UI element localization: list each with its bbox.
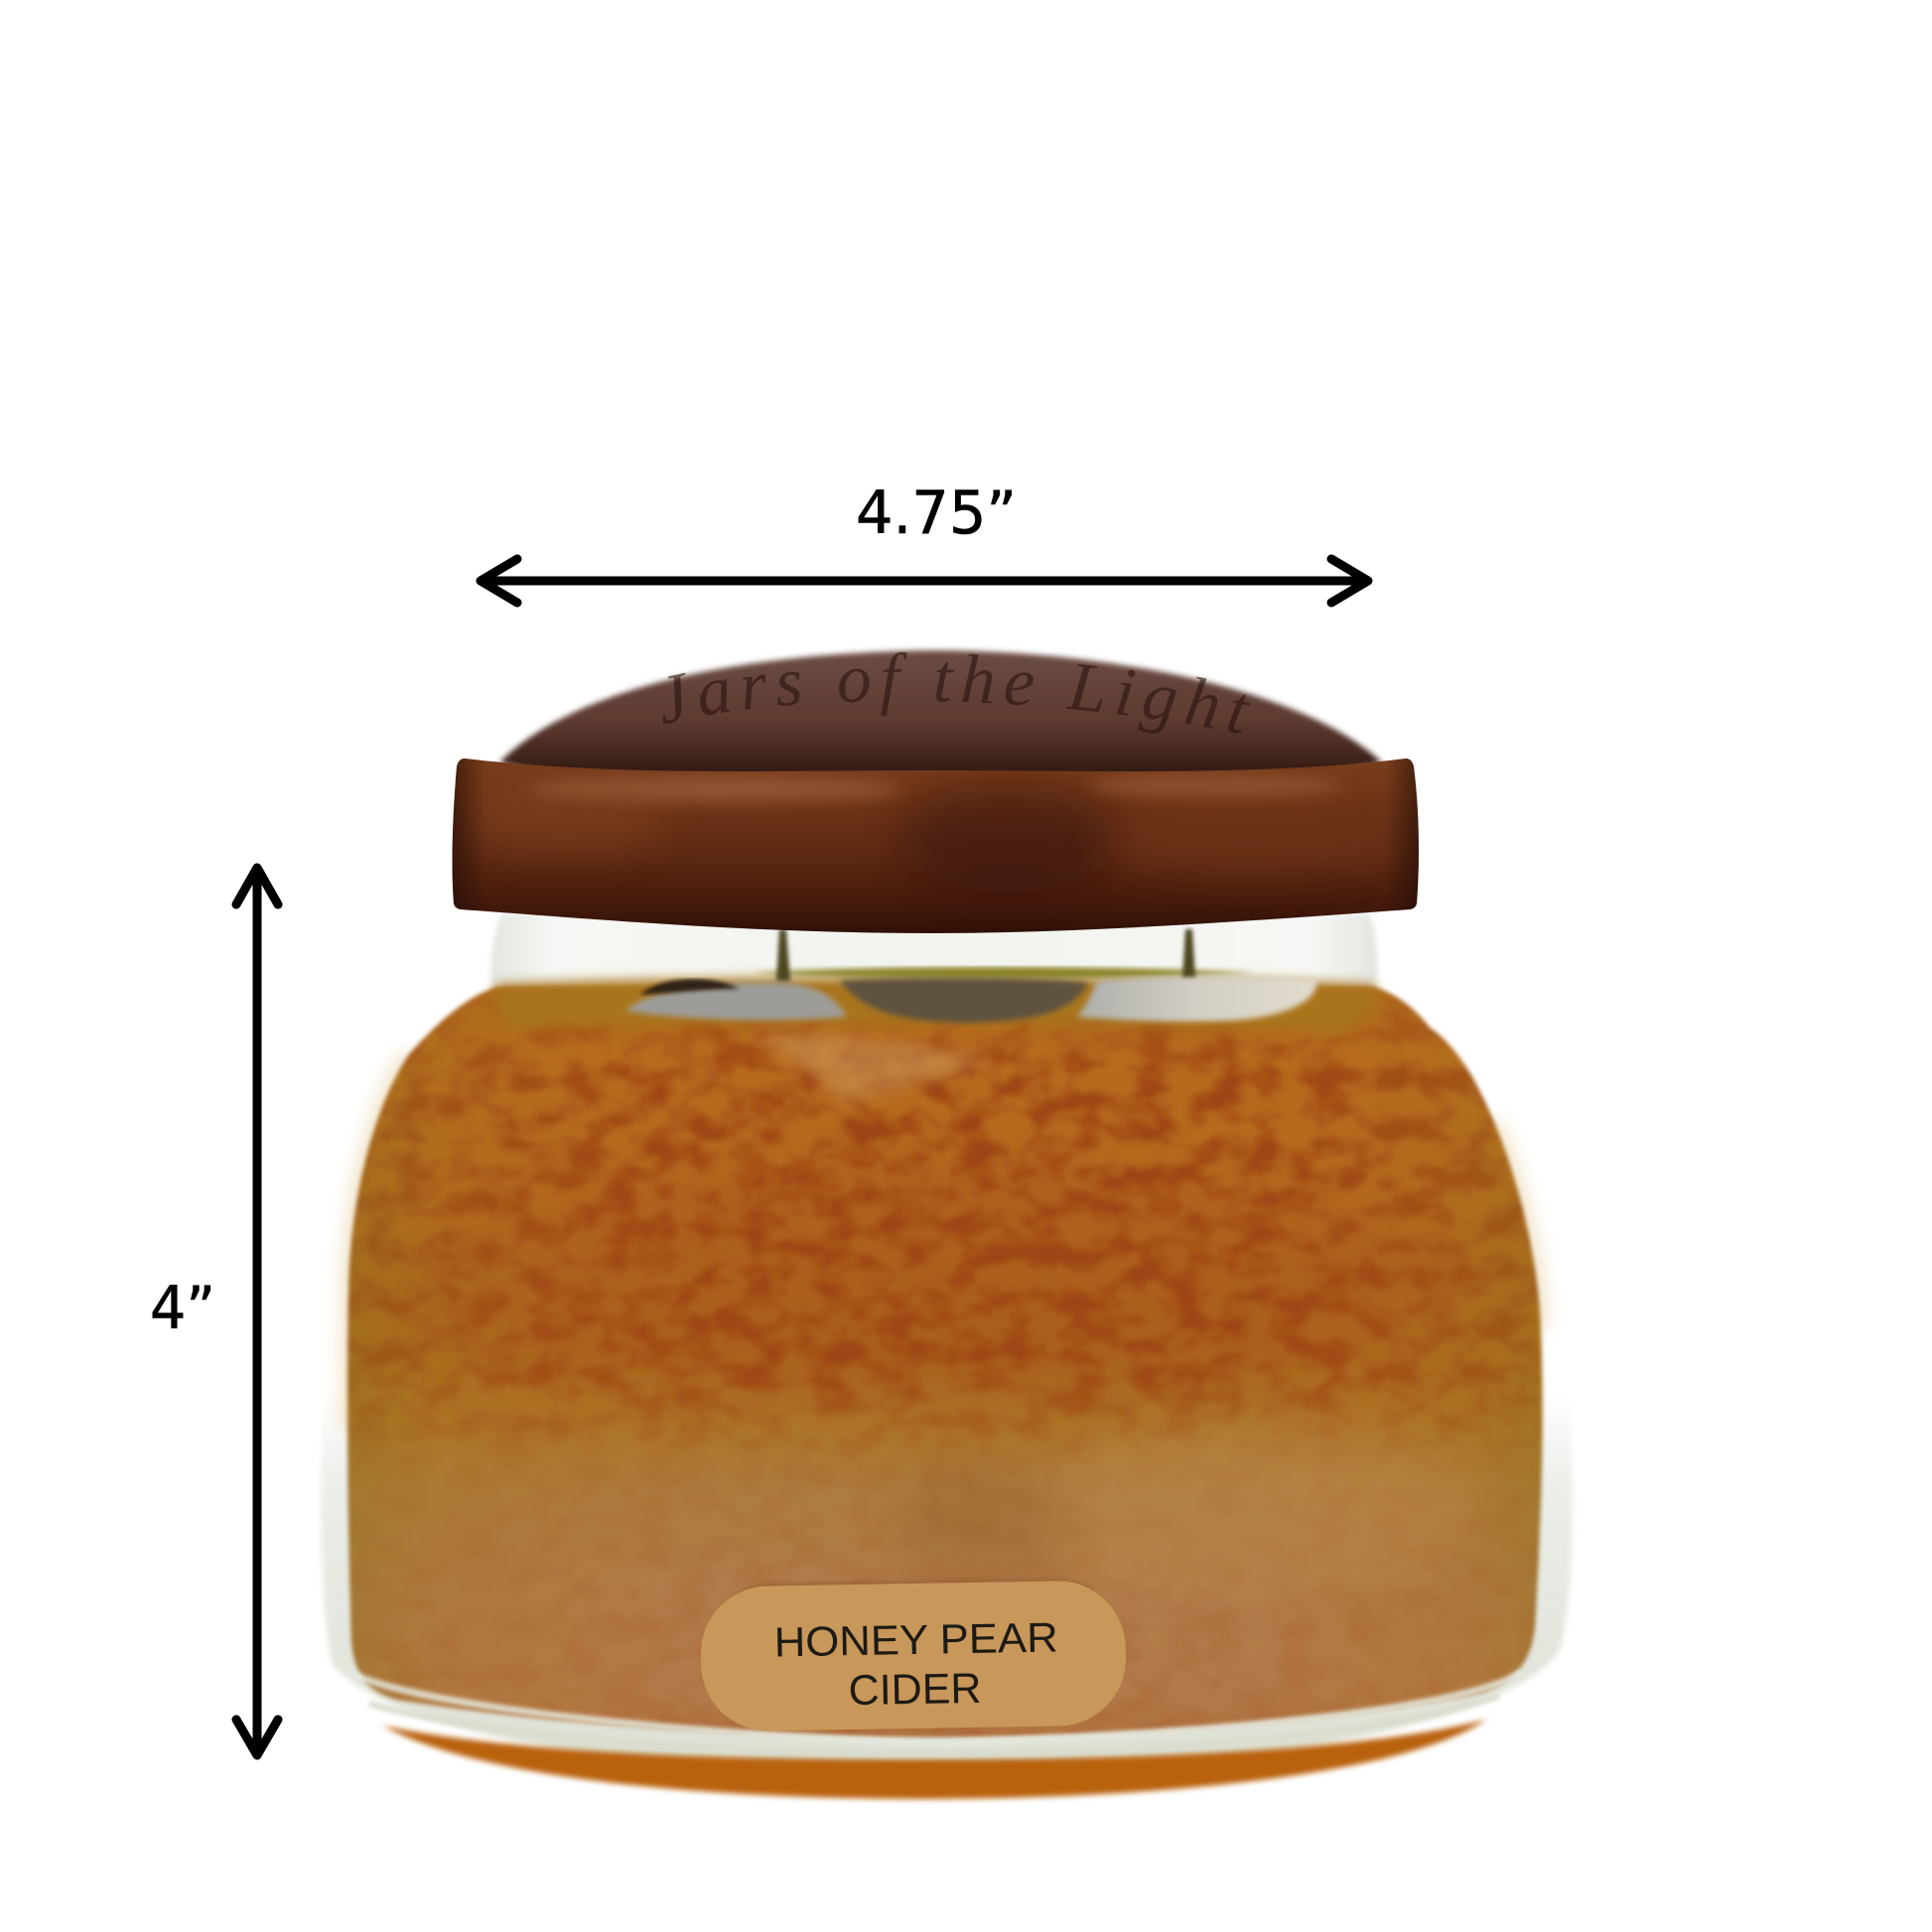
candle pool right xyxy=(1077,976,1316,1022)
glass base halo xyxy=(322,1390,1573,1777)
pale lower wax patch xyxy=(1078,1412,1450,1579)
centre wick pool xyxy=(840,978,1088,1023)
band dark patch xyxy=(898,784,1117,894)
lid embossed text: Jars of the Light xyxy=(663,651,1251,734)
candle pool left xyxy=(625,983,847,1020)
dark hollow xyxy=(640,979,740,995)
width label: 4.75” xyxy=(856,479,1017,548)
lid dome xyxy=(499,650,1382,794)
olive melt line xyxy=(753,967,1256,979)
glass base rim xyxy=(334,1660,1522,1743)
wax top surface xyxy=(495,967,1376,1102)
label shadow xyxy=(706,1577,1121,1729)
label text: HONEY PEAR xyxy=(773,1613,1058,1665)
reddish wax band xyxy=(677,1196,1301,1382)
product label xyxy=(700,1577,1127,1732)
wax mottling xyxy=(338,993,1559,1767)
product label: CIDER xyxy=(848,1665,982,1715)
glass neck xyxy=(490,913,1377,993)
width arrow xyxy=(481,559,1368,603)
lid band xyxy=(447,755,1425,938)
wax body xyxy=(338,978,1559,1772)
height arrow xyxy=(236,868,278,1755)
wax halo xyxy=(347,1054,1541,1430)
dark lower wax patch xyxy=(923,1483,1051,1561)
band highlights xyxy=(526,776,903,802)
orange base shadow xyxy=(382,1720,1486,1799)
pale wax highlight xyxy=(755,1033,993,1102)
upper wax rim xyxy=(495,977,1376,1033)
wicks xyxy=(776,929,1195,981)
jar xyxy=(320,600,1574,1804)
infographic: jar with dimensions xyxy=(153,489,1574,1804)
height label: 4” xyxy=(150,1274,215,1343)
